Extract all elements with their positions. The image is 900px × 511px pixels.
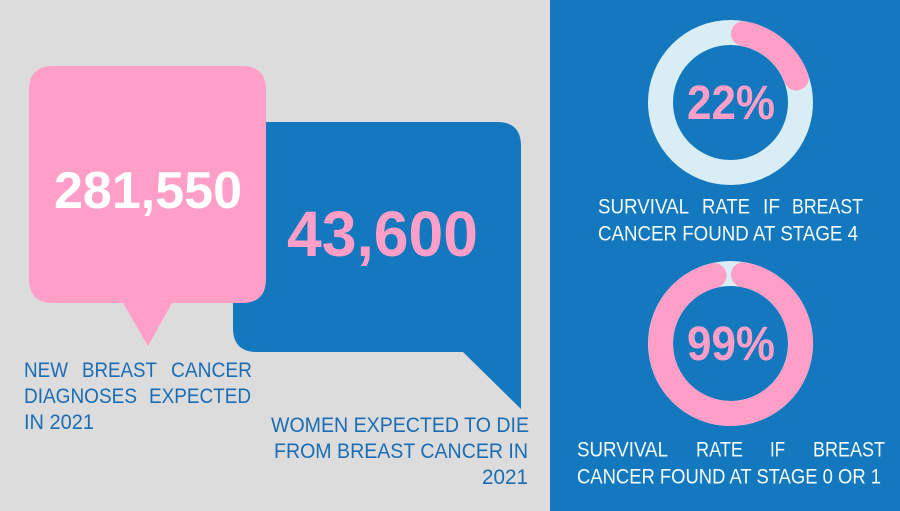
text: stage 4 survival — [598, 194, 863, 246]
chart: 22% donut — [660, 32, 800, 172]
text: women expected to die: WOMEN EXPECTED TO DIE — [271, 413, 529, 437]
number: 43,600: 43,600 — [287, 198, 478, 270]
text: new breast cancer diagnoses: CANCER — [171, 358, 252, 382]
value: 22%: 22% — [687, 77, 775, 130]
text: stage 4 survival: RATE — [702, 194, 750, 218]
text: stage 4 survival: SURVIVAL — [598, 194, 689, 218]
text: new breast cancer diagnoses — [24, 358, 252, 434]
number: 281,550: 281,550 — [54, 162, 242, 220]
chart: 99% donut — [660, 274, 801, 414]
text: new breast cancer diagnoses: DIAGNOSES — [24, 384, 137, 408]
text: stage 0 or 1 survival: RATE — [696, 438, 743, 462]
text: stage 0 or 1 survival: BREAST — [813, 438, 885, 462]
speech bubble: women expected to die — [233, 122, 521, 409]
text: women expected to die: FROM BREAST CANCER IN — [274, 439, 528, 463]
text: stage 0 or 1 survival: SURVIVAL — [577, 438, 668, 462]
speech bubble: new diagnoses — [29, 66, 266, 346]
text: women expected to die — [271, 413, 529, 489]
text: new breast cancer diagnoses: BREAST — [82, 358, 157, 382]
text: stage 4 survival: CANCER FOUND AT STAGE 4 — [598, 222, 858, 246]
text: stage 4 survival: BREAST — [792, 194, 863, 218]
text: new breast cancer diagnoses: NEW — [24, 358, 69, 382]
text: stage 0 or 1 survival — [577, 438, 885, 488]
text: women expected to die: 2021 — [482, 465, 528, 489]
text: new breast cancer diagnoses: IN 2021 — [24, 410, 94, 434]
value: 99%: 99% — [687, 318, 775, 371]
text: new breast cancer diagnoses: EXPECTED — [149, 384, 251, 408]
text: stage 0 or 1 survival: IF — [770, 438, 785, 462]
text: stage 4 survival: IF — [763, 194, 780, 218]
panel: survival rates — [550, 0, 900, 511]
